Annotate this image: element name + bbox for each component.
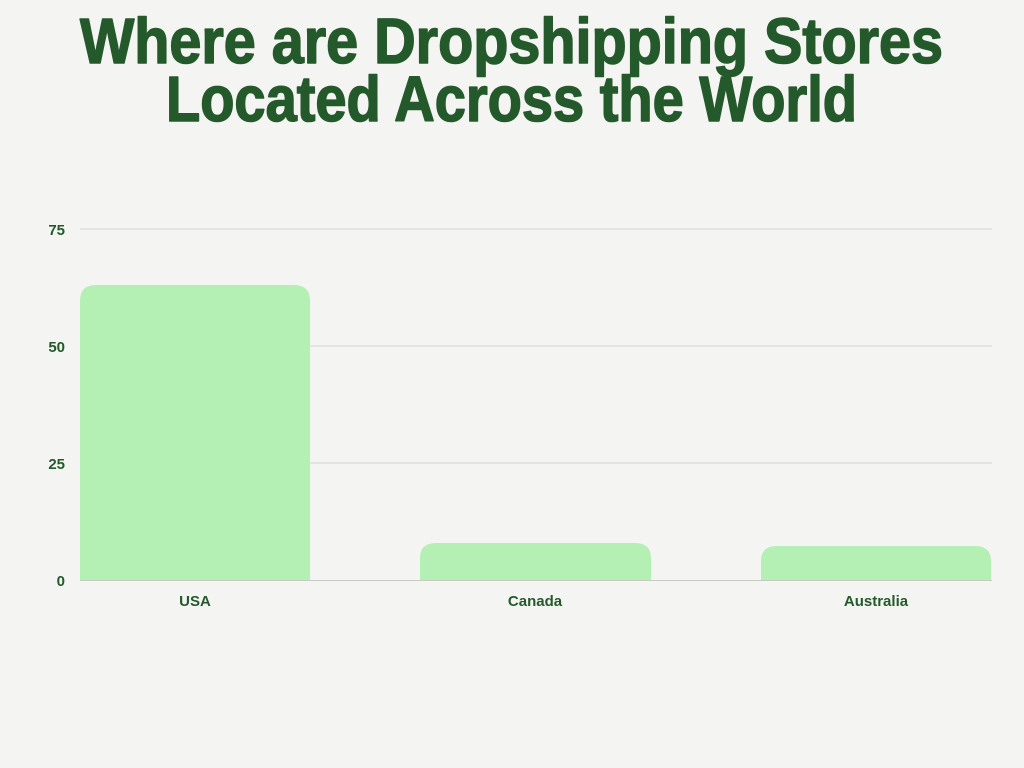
title: Where are Dropshipping Stores [80, 5, 943, 77]
x axis labels: USA [179, 593, 211, 610]
bar: USA [80, 285, 310, 580]
x axis labels: Canada [508, 593, 563, 610]
y axis labels: 25 [48, 456, 65, 473]
y axis labels: 50 [48, 339, 65, 356]
x axis labels [179, 593, 909, 610]
y axis labels: 75 [48, 222, 65, 239]
y axis labels: 0 [57, 573, 65, 590]
bar chart [48, 222, 992, 610]
x axis labels: Australia [844, 593, 909, 610]
y axis labels [48, 222, 65, 590]
title: Located Across the World [166, 63, 857, 135]
title [80, 5, 943, 135]
bar: Australia [761, 546, 991, 580]
bar: Canada [420, 543, 651, 580]
